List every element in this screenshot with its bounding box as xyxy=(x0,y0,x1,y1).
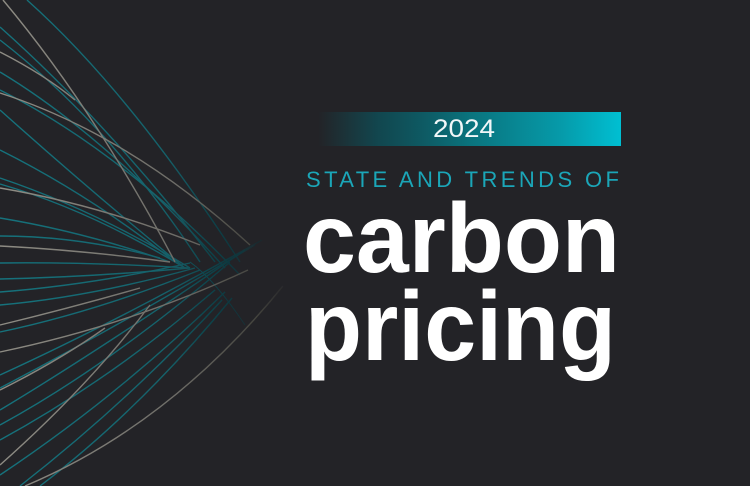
title: pricing xyxy=(305,271,616,381)
year banner: 2024 xyxy=(433,115,495,143)
title xyxy=(303,183,620,381)
title: carbon xyxy=(303,183,620,293)
decorative fan of curved lines xyxy=(0,0,283,486)
subtitle: STATE AND TRENDS OF xyxy=(306,167,619,192)
year banner xyxy=(318,112,621,146)
